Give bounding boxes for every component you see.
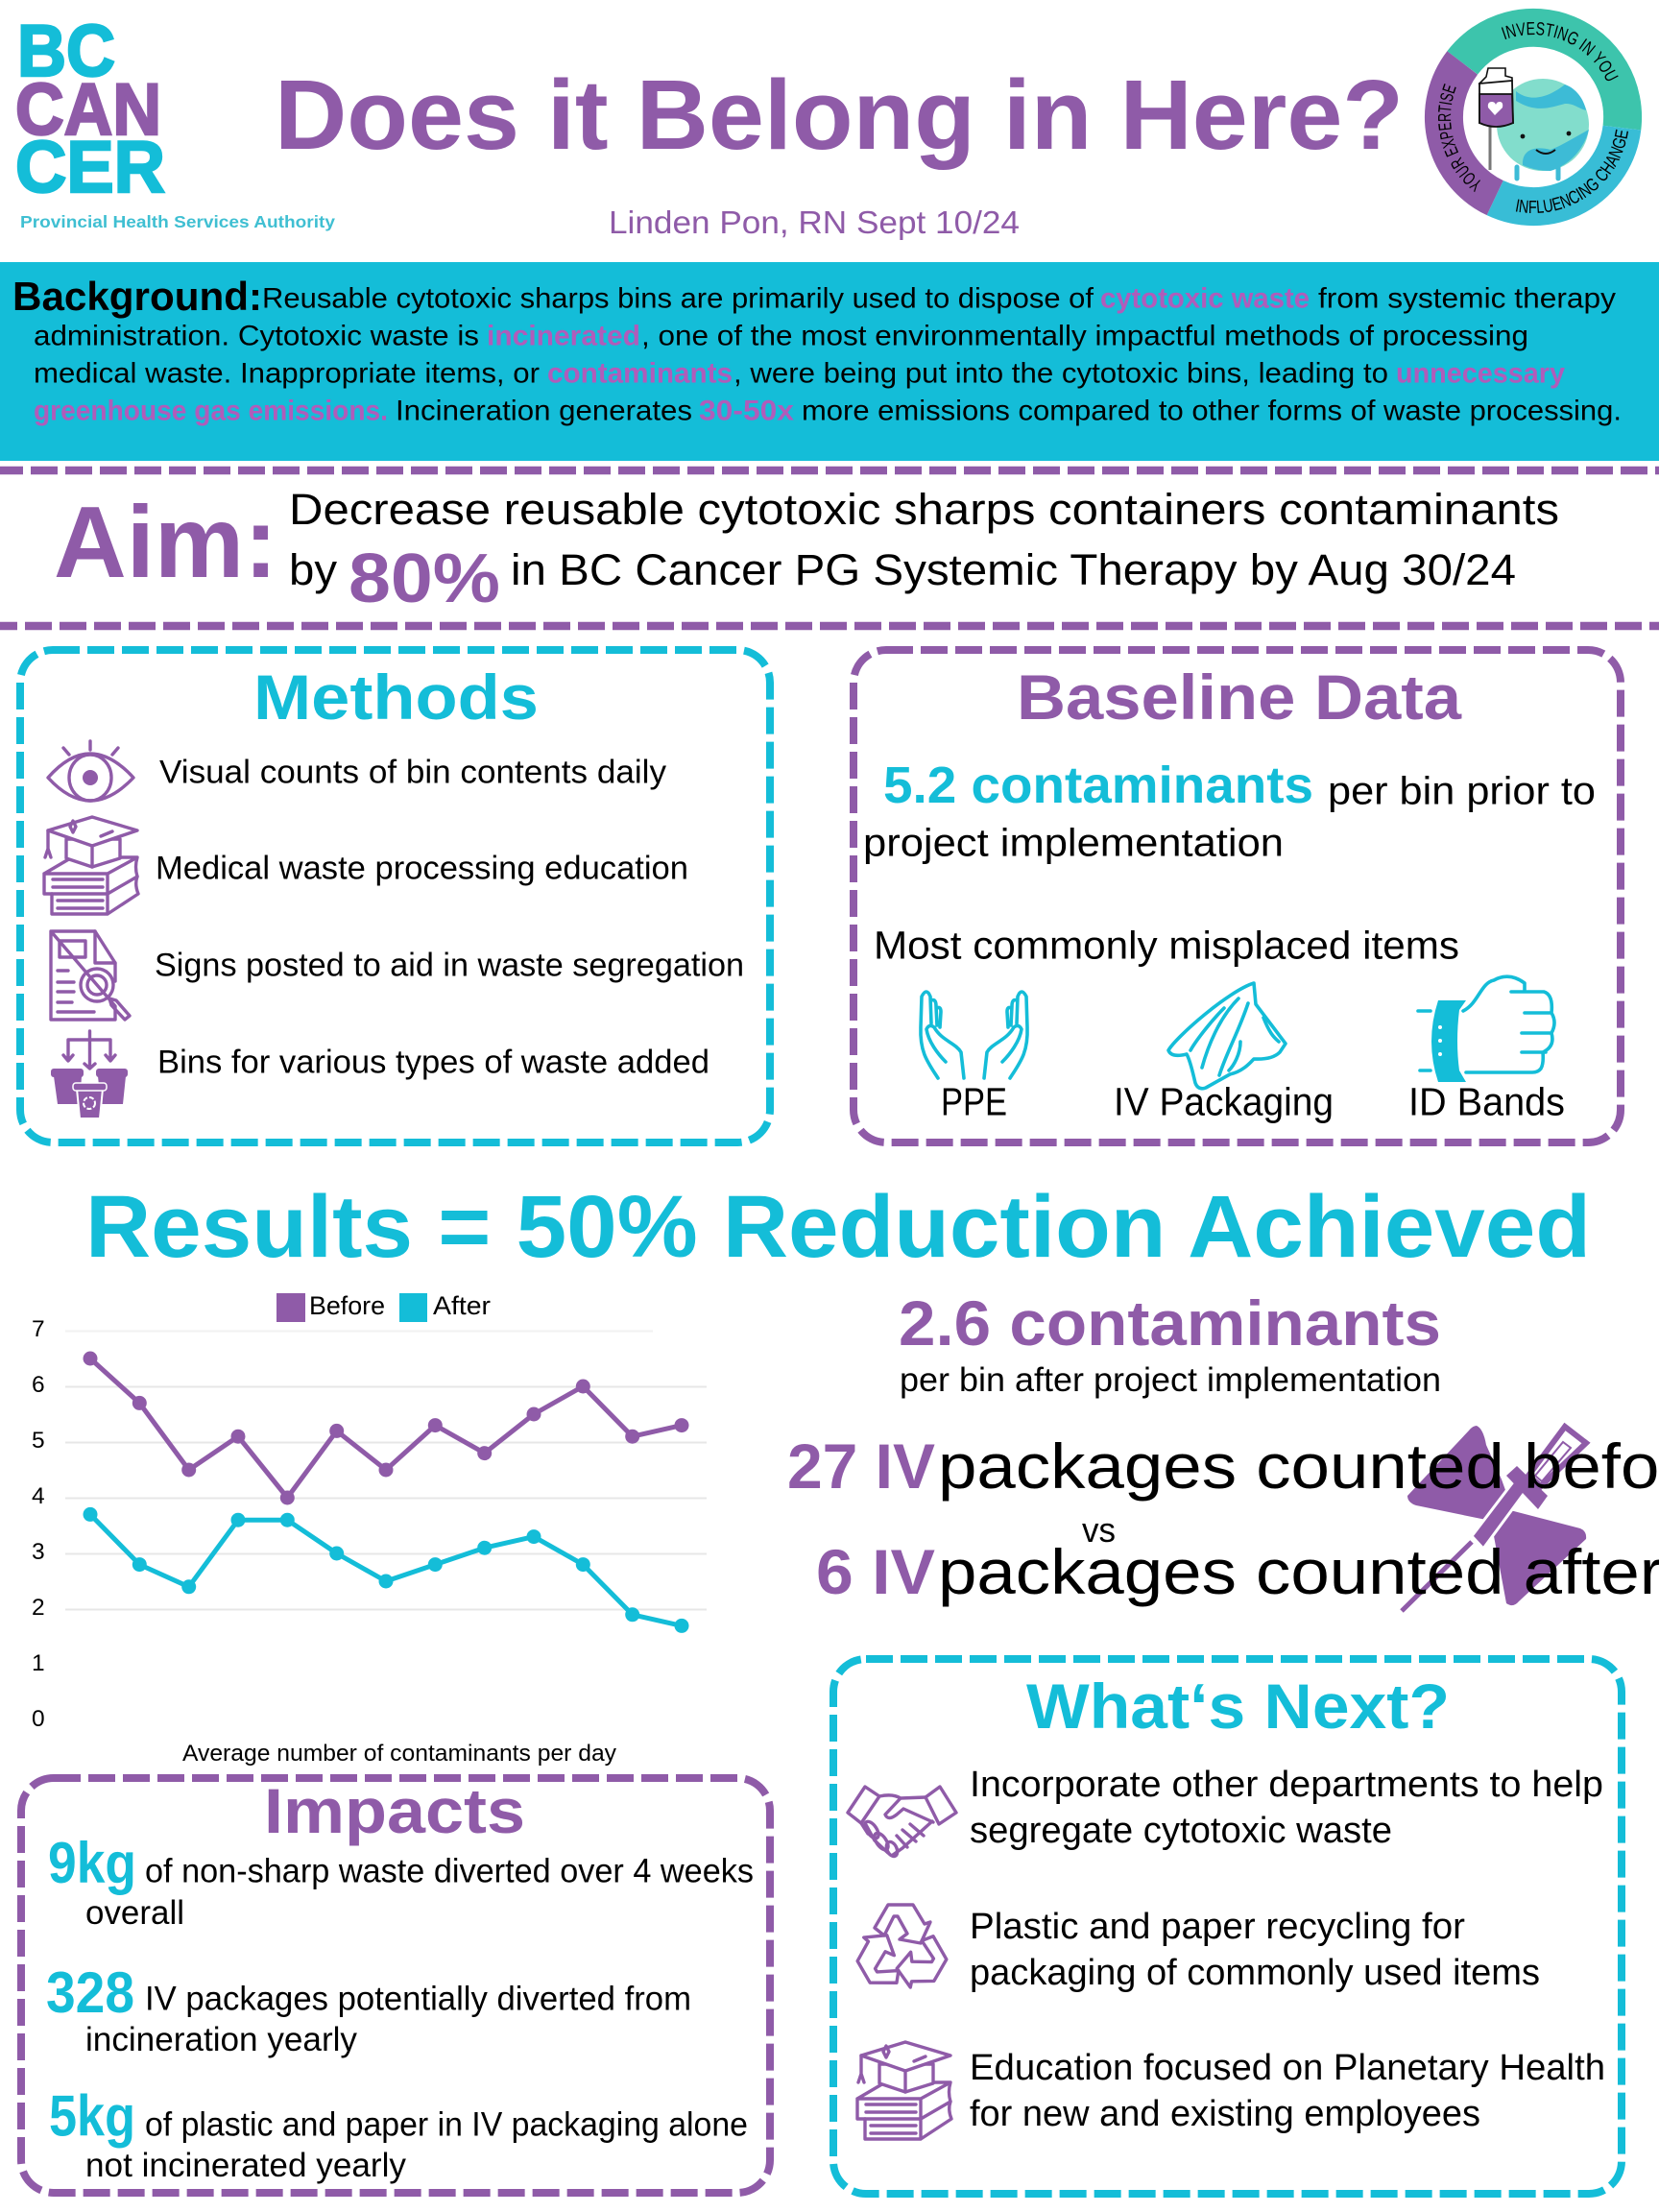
text: bins: Bins for various types of waste added bbox=[157, 1045, 709, 1081]
text: most commonly misplaced: Most commonly misplaced items bbox=[874, 924, 1459, 968]
icon: hands bbox=[921, 992, 1027, 1078]
icon: IV packaging bbox=[1168, 983, 1286, 1089]
text: education bbox=[970, 2048, 1605, 2134]
chart: average contaminants per day bbox=[32, 1291, 707, 1767]
badge: investing in you, your expertise, influencing change: INVESTING IN YOU bbox=[1502, 22, 1619, 81]
text: project implementation: project implementation bbox=[863, 820, 1284, 864]
text: ID bands: ID Bands bbox=[1408, 1079, 1565, 1123]
stat: 328: 328 bbox=[46, 1960, 134, 2025]
axis labels: 7 bbox=[32, 1316, 45, 1342]
text block: background paragraph: Incineration generates bbox=[396, 396, 692, 426]
stat: 5.2 contaminants: 5.2 contaminants bbox=[883, 757, 1313, 814]
text: education: Medical waste processing education bbox=[156, 851, 688, 887]
text block: aim statement bbox=[289, 485, 1559, 617]
axis labels: 6 bbox=[32, 1372, 45, 1398]
text block: background paragraph: more emissions compared to other forms of waste processing. bbox=[802, 396, 1622, 426]
axis labels: 1 bbox=[32, 1650, 45, 1676]
title: Does it Belong in Here? bbox=[275, 60, 1404, 170]
heading: Baseline Data: Baseline Data bbox=[1017, 661, 1462, 733]
stat: 9kg: overall bbox=[85, 1894, 184, 1932]
axis labels: 2 bbox=[32, 1595, 45, 1621]
text block: background paragraph: 30-50x bbox=[699, 396, 794, 426]
icon: graduation cap on books bbox=[857, 2042, 951, 2139]
heading: Background: Background: bbox=[12, 274, 262, 319]
icon: graduation cap on books bbox=[44, 817, 138, 914]
text block: background paragraph: administration. Cytotoxic waste is bbox=[34, 321, 479, 351]
stat: 5kg: of plastic and paper in IV packaging alone bbox=[145, 2106, 748, 2143]
panel: background bbox=[0, 262, 1659, 461]
heading: What's Next: What‘s Next? bbox=[1026, 1671, 1450, 1742]
panel: aim bbox=[54, 485, 1559, 617]
text: visual counts: Visual counts of bin contents daily bbox=[159, 755, 666, 791]
legend: After bbox=[433, 1291, 491, 1320]
text: 6 IV after: 6 IV bbox=[816, 1536, 935, 1607]
logo: BC Cancer: CAN bbox=[15, 69, 161, 151]
text: per bin prior: per bin prior to bbox=[1328, 768, 1596, 812]
text block: background paragraph: contaminants bbox=[547, 357, 733, 390]
icon: recycle bbox=[849, 1905, 953, 1996]
text: incorporate departments bbox=[970, 1765, 1603, 1851]
logo: BC Cancer: CER bbox=[15, 127, 165, 208]
text block: aim statement: by bbox=[289, 545, 338, 594]
text: recycling bbox=[970, 1907, 1540, 1993]
text: recycling: packaging of commonly used items bbox=[970, 1953, 1540, 1993]
text block: background paragraph: unnecessary bbox=[1396, 357, 1565, 390]
text block: background paragraph: , were being put into the cytotoxic bins, leading to bbox=[733, 357, 1388, 390]
icon: eye bbox=[48, 741, 133, 801]
chart caption: Average number of contaminants per day bbox=[182, 1741, 616, 1767]
heading: Impacts: Impacts bbox=[264, 1775, 525, 1846]
logo: BC Cancer bbox=[15, 11, 335, 231]
text: PPE: PPE bbox=[941, 1079, 1007, 1123]
text block: background paragraph: Reusable cytotoxic sharps bins are primarily used to dispose of bbox=[262, 282, 1094, 315]
author line: Linden Pon, RN Sept 10/24 bbox=[609, 204, 1020, 240]
text: IV packaging: IV Packaging bbox=[1114, 1079, 1334, 1123]
text: 27 IV before: 27 IV bbox=[787, 1431, 935, 1502]
stat: 328: incineration yearly bbox=[85, 2021, 357, 2058]
icon: IV needle bbox=[1402, 1426, 1586, 1611]
stat: 328 bbox=[46, 1960, 691, 2058]
badge: investing in you, your expertise, influencing change bbox=[1425, 8, 1642, 227]
panel: what's next bbox=[833, 1659, 1622, 2194]
line: after bbox=[83, 1507, 689, 1633]
text block: aim statement: Decrease reusable cytotoxic sharps containers contaminants bbox=[289, 485, 1559, 534]
icon: document with magnifier bbox=[51, 931, 130, 1020]
text: per bin after: per bin after project implementation bbox=[900, 1361, 1441, 1399]
axis labels: 0 bbox=[32, 1706, 45, 1732]
text block: background paragraph: incinerated bbox=[487, 321, 640, 351]
axis labels: 5 bbox=[32, 1428, 45, 1454]
legend: Before bbox=[309, 1291, 385, 1320]
badge: investing in you, your expertise, influencing change: YOUR EXPERTISE bbox=[1438, 84, 1480, 192]
text: incorporate departments: segregate cytotoxic waste bbox=[970, 1811, 1392, 1851]
logo: BC Cancer: BC bbox=[17, 11, 115, 92]
text: 27 IV before: packages counted before bbox=[938, 1431, 1659, 1502]
stat: 5kg bbox=[49, 2083, 748, 2184]
icon: waste bins bbox=[51, 1031, 128, 1118]
stat: 328: IV packages potentially diverted from bbox=[145, 1980, 691, 2018]
heading: Aim: Aim: bbox=[54, 486, 277, 599]
text: education: for new and existing employees bbox=[970, 2094, 1480, 2134]
text block: background paragraph bbox=[34, 282, 1622, 426]
text block: aim statement: in BC Cancer PG Systemic Therapy by Aug 30/24 bbox=[511, 545, 1516, 594]
text: signs: Signs posted to aid in waste segregation bbox=[155, 947, 744, 983]
heading: results: Results = 50% Reduction Achieved bbox=[85, 1178, 1591, 1276]
text: education: Education focused on Planetary Health bbox=[970, 2048, 1605, 2088]
text block: background paragraph: cytotoxic waste bbox=[1100, 282, 1310, 315]
line: before bbox=[83, 1352, 689, 1505]
stat: 2.6 contaminants: 2.6 contaminants bbox=[899, 1287, 1441, 1358]
text block: background paragraph: greenhouse gas emissions. bbox=[34, 396, 388, 426]
axis labels: 4 bbox=[32, 1483, 45, 1509]
badge: investing in you, your expertise, influencing change: INFLUENCING CHANGE bbox=[1515, 129, 1628, 213]
text block: background paragraph: medical waste. Inappropriate items, or bbox=[34, 357, 540, 390]
legend bbox=[276, 1291, 491, 1322]
stat: 5kg: 5kg bbox=[49, 2083, 135, 2149]
text block: background paragraph: , one of the most environmentally impactful methods of processing bbox=[641, 321, 1528, 351]
text block: background paragraph: from systemic therapy bbox=[1318, 282, 1616, 315]
text block: aim statement: 80% bbox=[349, 541, 500, 617]
stat: 9kg bbox=[48, 1831, 754, 1932]
stat: 9kg: 9kg bbox=[48, 1831, 136, 1895]
text: incorporate departments: Incorporate other departments to help bbox=[970, 1765, 1603, 1805]
panel: methods bbox=[20, 650, 770, 1142]
logo: BC Cancer: Provincial Health Services Authority bbox=[20, 212, 335, 231]
panel: baseline data bbox=[854, 650, 1621, 1142]
icon: handshake bbox=[848, 1787, 956, 1858]
heading: Methods: Methods bbox=[253, 661, 539, 733]
axis labels: 3 bbox=[32, 1539, 45, 1565]
text: 6 IV after: packages counted after bbox=[938, 1536, 1659, 1607]
stat: 5kg: not incinerated yearly bbox=[85, 2147, 406, 2184]
text: recycling: Plastic and paper recycling for bbox=[970, 1907, 1465, 1947]
axis labels bbox=[32, 1316, 45, 1732]
icon: fist with ID band bbox=[1418, 976, 1554, 1082]
text: vs: vs bbox=[1082, 1510, 1116, 1550]
panel: impacts bbox=[21, 1775, 770, 2193]
stat: 9kg: of non-sharp waste diverted over 4 weeks bbox=[145, 1853, 754, 1889]
